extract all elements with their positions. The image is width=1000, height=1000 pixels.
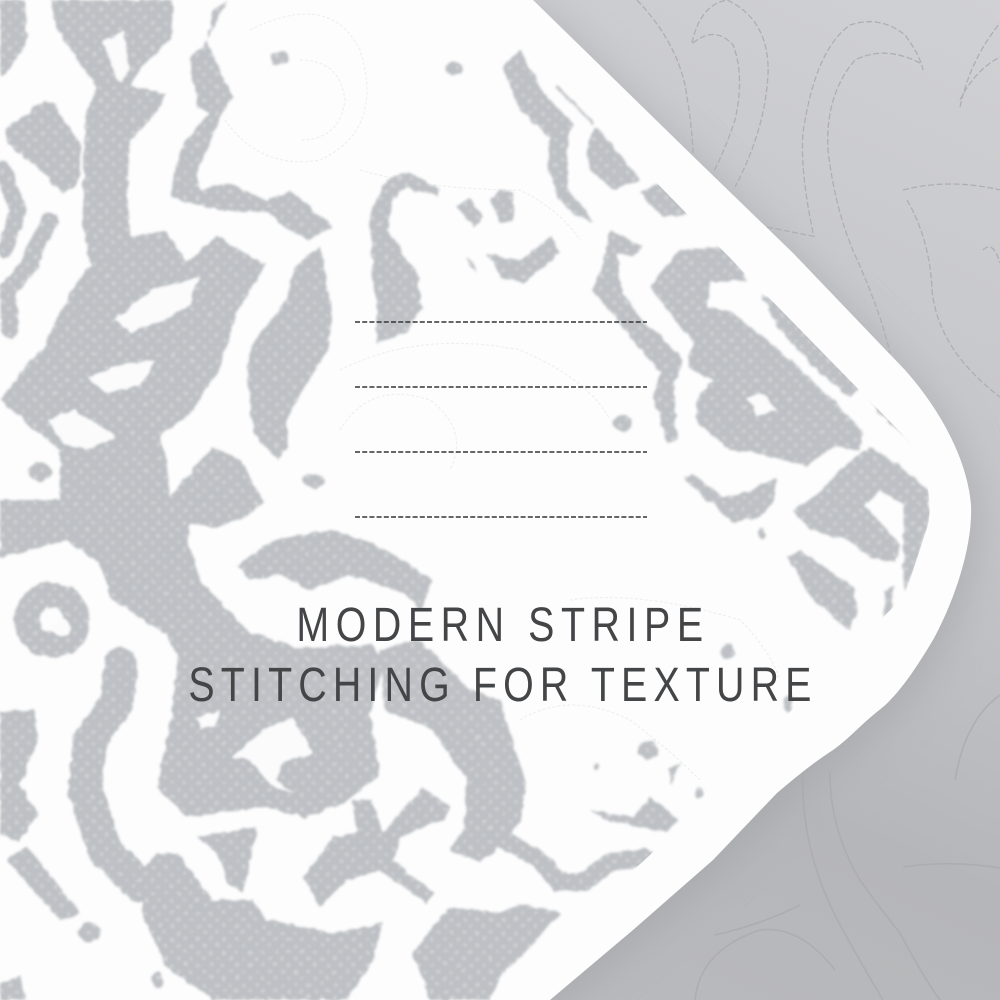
dashed lines bbox=[355, 322, 647, 517]
background stitching bbox=[637, 0, 1000, 397]
lobed leaf bbox=[247, 247, 333, 460]
top worm bbox=[238, 530, 433, 610]
upper branch bbox=[170, 0, 333, 240]
lower ridge bbox=[683, 473, 777, 522]
lower background embossed stitching bbox=[695, 695, 1000, 1000]
trunk bbox=[50, 0, 172, 290]
upper right strokes bbox=[503, 50, 593, 223]
left column bbox=[0, 710, 38, 842]
ring mass bbox=[0, 232, 265, 500]
caption line 2: STITCHING FOR TEXTURE bbox=[188, 659, 818, 712]
chain bbox=[505, 840, 645, 882]
small blob bbox=[28, 463, 52, 481]
top left fragment bbox=[0, 0, 27, 75]
lower right mass bbox=[413, 903, 560, 1000]
left worm bbox=[85, 665, 140, 885]
mid band bbox=[0, 447, 385, 818]
left cluster bbox=[7, 100, 82, 193]
ring bbox=[27, 595, 77, 645]
white print openings bbox=[47, 30, 777, 795]
crossing arm bbox=[303, 787, 450, 907]
right stripe bbox=[760, 293, 860, 397]
bottom center mass bbox=[143, 853, 383, 1000]
right ring mass bbox=[793, 447, 930, 592]
caption line 1: MODERN STRIPE bbox=[296, 599, 710, 652]
side chain bbox=[593, 230, 683, 443]
arc bbox=[590, 797, 677, 832]
s-shape bbox=[370, 172, 440, 343]
faint fabric stitching bbox=[225, 14, 780, 780]
right lobe bbox=[380, 640, 525, 862]
right mass bbox=[650, 247, 863, 467]
